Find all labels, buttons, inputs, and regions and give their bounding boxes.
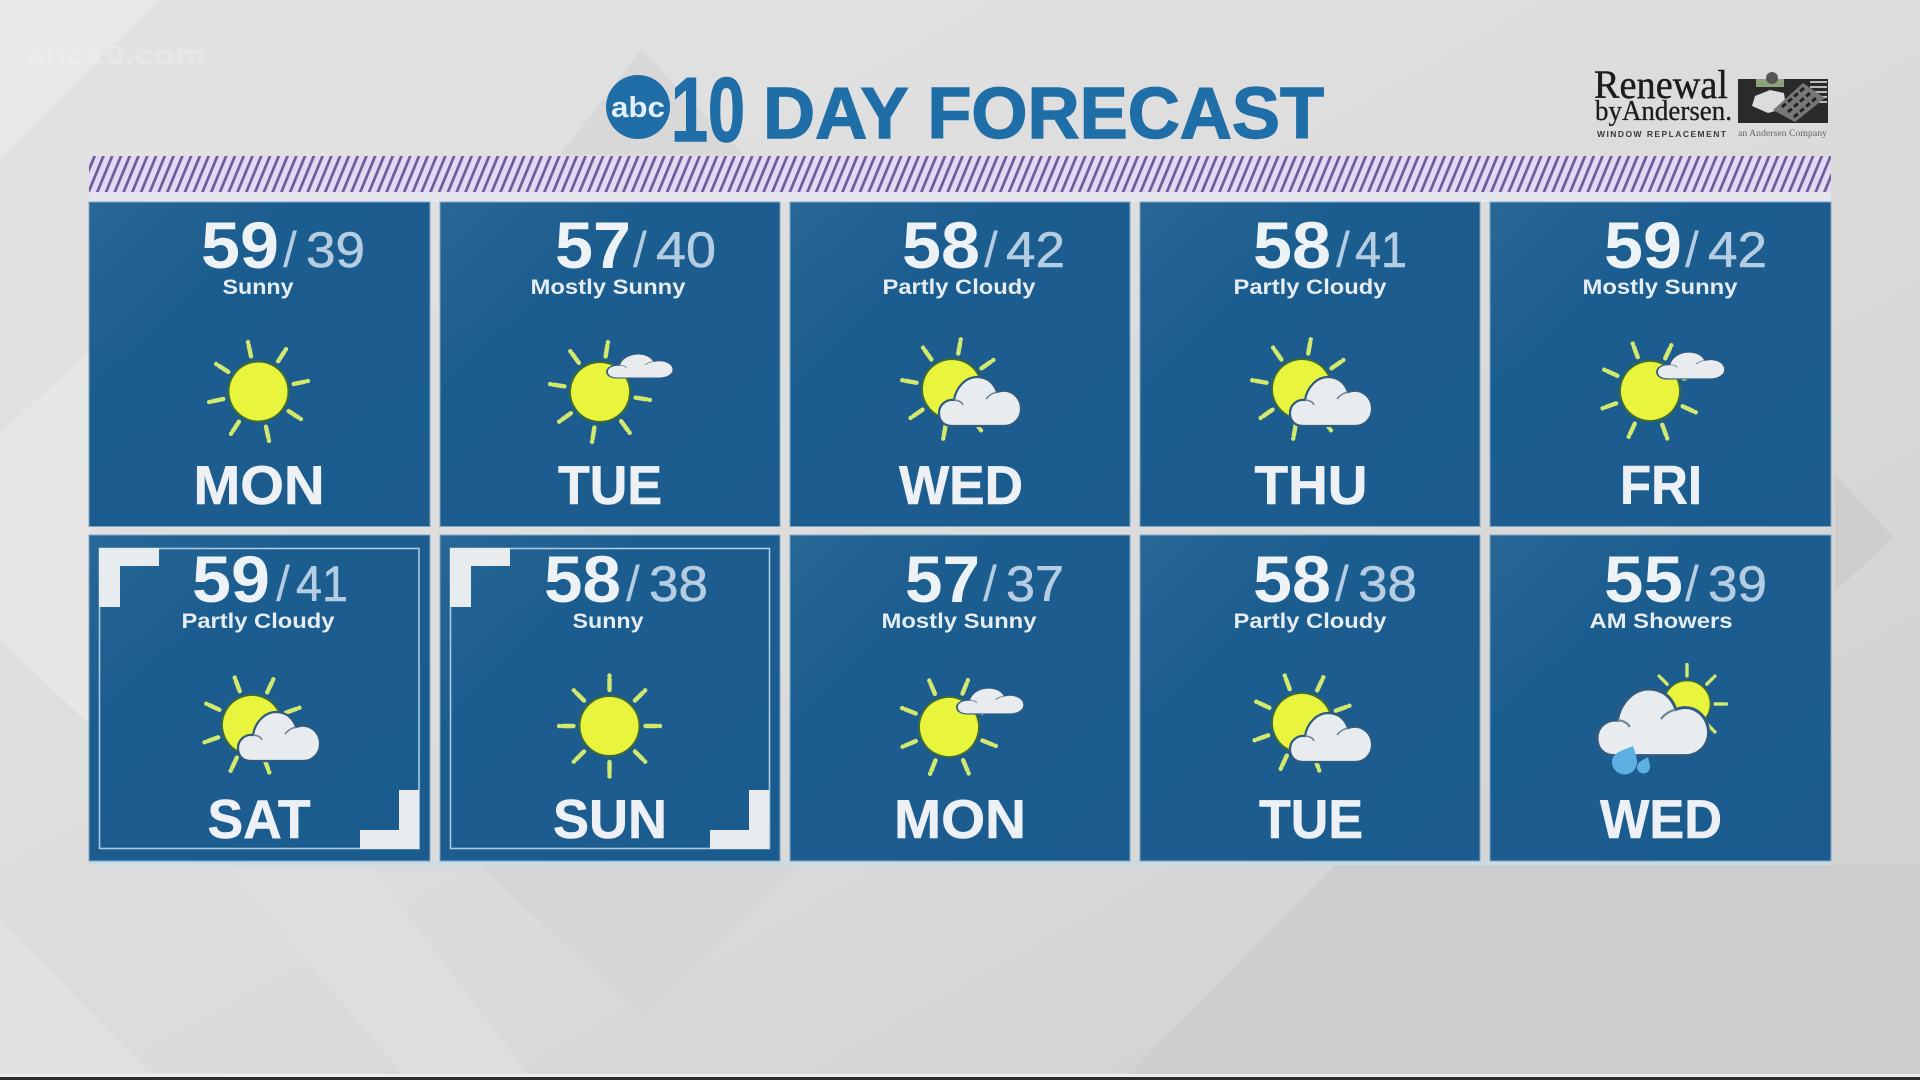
condition: AM Showers: [1590, 610, 1732, 633]
condition: Partly Cloudy: [1234, 610, 1387, 633]
day: TUE: [558, 454, 662, 516]
icon: window installer illustration: [1738, 72, 1828, 123]
temperature: /: [1335, 556, 1349, 612]
temperature: /: [283, 222, 297, 278]
day: SUN: [553, 788, 667, 850]
temperature: 39: [1708, 556, 1767, 612]
watermark: abc10.com: [26, 40, 206, 70]
panel: Sunday: [440, 535, 780, 861]
temperature: /: [276, 556, 290, 612]
icon: sun: [558, 674, 662, 778]
temperature: 59: [1604, 208, 1682, 282]
panel: Monday: [89, 202, 430, 526]
temperature: [555, 208, 716, 282]
icon: sun: [197, 330, 320, 453]
temperature: /: [1685, 556, 1699, 612]
panel: next Tuesday: [1140, 535, 1480, 861]
sponsor logo: Renewal by Andersen: an Andersen Company: [1738, 128, 1828, 138]
temperature: /: [983, 556, 997, 612]
icon: mostly sunny: [881, 659, 1024, 795]
temperature: [905, 542, 1064, 616]
title: DAY FORECAST: [763, 74, 1324, 154]
temperature: 59: [201, 208, 279, 282]
temperature: [902, 208, 1065, 282]
temperature: 59: [192, 542, 270, 616]
temperature: [544, 542, 708, 616]
temperature: [1253, 542, 1417, 616]
condition: Partly Cloudy: [1234, 276, 1387, 299]
sponsor logo: Renewal by Andersen: byAndersen.: [1595, 95, 1732, 127]
temperature: 58: [544, 542, 621, 616]
condition: Mostly Sunny: [530, 276, 686, 299]
panel: next Monday: [790, 535, 1130, 861]
temperature: 42: [1006, 222, 1065, 278]
condition: Mostly Sunny: [1582, 276, 1738, 299]
temperature: /: [984, 222, 998, 278]
temperature: /: [1685, 222, 1699, 278]
logo: abc10: abc: [611, 92, 665, 124]
temperature: 58: [1253, 208, 1331, 282]
sponsor logo: Renewal by Andersen: Renewal: [1594, 62, 1728, 107]
weekend frame: [99, 548, 419, 849]
panel: Friday: [1490, 202, 1831, 526]
icon: partly cloudy: [1235, 656, 1372, 790]
temperature: 39: [306, 222, 365, 278]
temperature: 58: [902, 208, 980, 282]
temperature: [1253, 208, 1407, 282]
condition: Partly Cloudy: [882, 276, 1036, 299]
temperature: /: [633, 222, 647, 278]
panel: Tuesday: [440, 202, 780, 526]
temperature: /: [1336, 222, 1350, 278]
temperature: 57: [555, 208, 631, 282]
day: FRI: [1620, 454, 1702, 516]
icon: partly cloudy: [892, 329, 1021, 449]
icon: mostly sunny: [541, 333, 673, 451]
panel: Saturday: [89, 535, 430, 861]
temperature: 41: [1355, 222, 1407, 278]
temperature: 41: [296, 556, 348, 612]
temperature: 37: [1006, 556, 1064, 612]
logo: abc10: [606, 60, 745, 161]
temperature: [192, 542, 348, 616]
hatched band: [89, 156, 1831, 202]
temperature: 42: [1708, 222, 1767, 278]
day: WED: [899, 454, 1023, 516]
icon: AM showers: [1597, 663, 1728, 774]
temperature: [201, 208, 365, 282]
temperature: 40: [656, 222, 716, 278]
day: MON: [194, 454, 324, 516]
panel: next Wednesday: [1490, 535, 1831, 861]
temperature: 38: [649, 556, 708, 612]
day: THU: [1254, 454, 1368, 516]
weekend frame: [450, 548, 770, 849]
day: WED: [1600, 788, 1722, 850]
panel: Wednesday: [790, 202, 1130, 526]
sponsor logo: Renewal by Andersen: [1594, 62, 1828, 139]
logo: abc10: 10: [671, 60, 745, 161]
day: TUE: [1259, 788, 1363, 850]
icon: partly cloudy: [1242, 329, 1372, 449]
icon: mostly sunny: [1583, 324, 1725, 458]
temperature: 55: [1604, 542, 1683, 616]
temperature: 38: [1358, 556, 1417, 612]
day: MON: [894, 788, 1026, 850]
temperature: /: [626, 556, 640, 612]
temperature: 57: [905, 542, 980, 616]
day: SAT: [208, 788, 310, 850]
temperature: 58: [1253, 542, 1331, 616]
condition: Mostly Sunny: [882, 610, 1037, 633]
condition: Partly Cloudy: [182, 610, 335, 633]
condition: Sunny: [572, 610, 644, 633]
sponsor logo: Renewal by Andersen: WINDOW REPLACEMENT: [1597, 129, 1727, 139]
temperature: [1604, 542, 1767, 616]
condition: Sunny: [222, 276, 294, 299]
temperature: [1604, 208, 1767, 282]
icon: partly cloudy: [185, 658, 320, 792]
panel: Thursday: [1140, 202, 1480, 526]
